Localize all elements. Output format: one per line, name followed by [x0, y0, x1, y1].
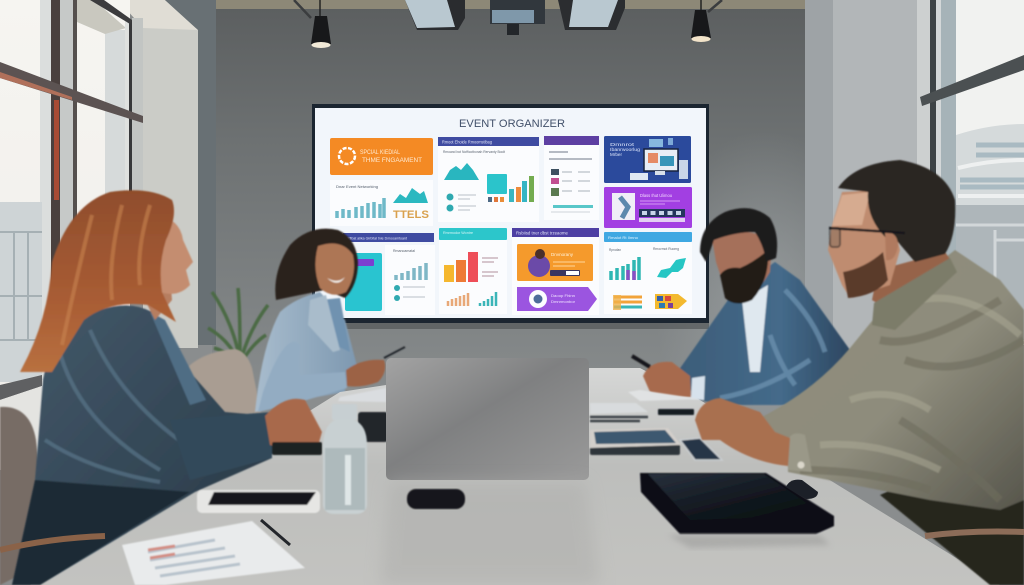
- paper right far: [628, 390, 700, 401]
- laptop lid: [386, 358, 589, 480]
- building windows: [960, 145, 1024, 187]
- back wall: [212, 8, 808, 388]
- lower terrace: [956, 205, 1024, 340]
- panel: lower orange and arrow: Rsbiisd tner dbst trzeaome: [516, 230, 568, 236]
- right man jacket highlights: [820, 298, 1020, 470]
- panel: networking card: Dnar Event Networking: [336, 184, 378, 189]
- panel: networking card: TTELS: [393, 209, 429, 221]
- panel: networking card: [330, 180, 433, 226]
- plant: [208, 288, 268, 365]
- center woman face: [315, 243, 354, 295]
- left woman hair highlights: [62, 205, 150, 345]
- right man collar: [872, 258, 957, 330]
- projector: [490, 0, 545, 35]
- panel: blue monitor card: Mrber: [610, 152, 622, 157]
- left window panes: [0, 0, 130, 400]
- right man hair: [838, 160, 955, 262]
- pane two tile column: [105, 30, 126, 200]
- panel: lower right charts: Rmalot Rt Ilmno: [608, 235, 639, 240]
- middle man cuff: [691, 376, 705, 400]
- building detail: [0, 232, 42, 340]
- left woman jacket: [12, 305, 272, 585]
- panel: top middle charts: [438, 137, 539, 222]
- left woman sleeve highlight: [45, 330, 190, 482]
- center woman lapel: [308, 295, 340, 352]
- tablet under hand: [680, 438, 722, 460]
- panel: lower orange and arrow: Dmnrmonbor: [551, 299, 576, 304]
- panel: lower middle charts: [439, 228, 507, 314]
- panel: top middle charts: Rmoot Ehoide Rmoomstibag: [442, 140, 492, 144]
- pendant lamp right: [691, 0, 711, 42]
- notebook stack: [590, 403, 648, 421]
- small mouse right: [786, 480, 818, 499]
- water bottle: [323, 404, 367, 514]
- left wall: [143, 28, 198, 348]
- center woman sleeve: [258, 342, 347, 412]
- table items near: [122, 404, 834, 585]
- right outside building: [956, 124, 1024, 340]
- right man glasses: [829, 228, 905, 247]
- panel: social media: THME FNGAAMENT: [362, 158, 422, 164]
- center woman shirt: [320, 298, 350, 352]
- middle man hair: [700, 208, 777, 262]
- middle man jacket: [676, 262, 850, 405]
- center woman pen: [384, 347, 405, 358]
- left woman device: [272, 442, 322, 455]
- left woman lapel: [150, 312, 206, 405]
- chair: center back: [183, 349, 261, 416]
- panel: lower left teal: Rtlbat alika Girbital tnie Dmooamtoant: [347, 236, 408, 240]
- panel: lower left teal: Rmanoamatal: [393, 249, 415, 253]
- middle man phone: [632, 356, 650, 367]
- left window: [0, 0, 143, 470]
- table items far: [338, 388, 722, 460]
- chair arm left: [0, 536, 105, 550]
- panel: blue monitor card: Dmnrot: [610, 142, 635, 147]
- right wall: [805, 0, 917, 360]
- wall light glow: [655, 130, 875, 470]
- paper front: [122, 521, 305, 585]
- panel: social media: SPCIAL KIEDIAL: [360, 150, 401, 156]
- chair arm right: [925, 532, 1024, 536]
- center woman hair: [275, 229, 358, 300]
- person: left woman: [12, 190, 322, 585]
- chair: left front: [0, 407, 44, 585]
- middle man face: [712, 231, 772, 300]
- right man ear: [885, 232, 898, 260]
- panel: lower right charts: Rmovmot Ruomg: [653, 247, 679, 251]
- panel: lower orange and arrow: [512, 228, 599, 315]
- building bands: [958, 160, 1024, 196]
- pane two top reveal: [77, 0, 126, 34]
- panel: top list: [544, 136, 599, 220]
- lower window sill light: [0, 386, 42, 470]
- terrace rail: [956, 225, 1024, 320]
- ceiling fixtures: [294, 0, 722, 48]
- middle man hand: [643, 362, 691, 397]
- right window panes: [956, 0, 1024, 345]
- right man cuff: [788, 433, 812, 472]
- panel: blue monitor card: Ibanrwoorlug: [610, 147, 641, 152]
- left woman lower jacket dark: [12, 480, 190, 585]
- light panel right: [558, 0, 625, 30]
- left woman sleeve: [170, 412, 272, 480]
- center woman smile: [327, 277, 345, 283]
- right man hand: [695, 398, 790, 466]
- panel: lower orange and arrow: Daoop Fhinn: [551, 293, 575, 298]
- center woman blazer: [255, 292, 358, 412]
- panel: purple card: [604, 187, 692, 228]
- dark lower body: [880, 430, 1024, 585]
- panel: lower left teal: [343, 233, 435, 315]
- screen title: EVENT ORGANIZER: [459, 118, 565, 130]
- right man forehead light: [832, 192, 870, 226]
- right man cuff button: [798, 462, 804, 468]
- right man jacket: [760, 250, 1024, 510]
- laptop reflection on table: [380, 482, 600, 585]
- screen surface: [315, 108, 706, 318]
- screen bezel: [312, 104, 709, 323]
- tablet stack: [590, 428, 681, 455]
- person: middle right man: [632, 208, 850, 405]
- light panel left: [405, 0, 465, 30]
- person: right man: [695, 160, 1024, 585]
- pen: [261, 520, 290, 545]
- panel: purple card: Dlass Ihut Ulimou: [640, 193, 672, 198]
- panel: social media: [330, 138, 433, 175]
- panel: lower right charts: Rpnofan: [609, 248, 621, 252]
- mouse black: [407, 489, 465, 509]
- left outside building: [0, 202, 42, 382]
- tablet black: [640, 473, 834, 534]
- conference table: [30, 368, 1000, 585]
- pendant lamp left: [311, 0, 331, 48]
- left wall column: [165, 0, 216, 345]
- right man face: [828, 190, 900, 298]
- track lights: [294, 0, 722, 18]
- panel: lower middle charts: Rmrmodor Wontre: [443, 231, 473, 235]
- right window: [917, 0, 1024, 360]
- right man jacket shadows: [800, 300, 1024, 500]
- tablet shadow: [668, 535, 830, 548]
- left window frame: [51, 0, 60, 380]
- right man beard: [843, 252, 888, 298]
- left woman hair: [20, 190, 176, 372]
- panel: blue monitor card: [604, 136, 691, 183]
- left soffit: [118, 0, 198, 30]
- left woman hand: [265, 399, 322, 449]
- dark bag: [358, 412, 388, 442]
- middle man highlight: [720, 290, 825, 398]
- pane one tile column: [40, 0, 51, 380]
- right wall shade: [805, 0, 833, 360]
- phone white: [197, 490, 320, 513]
- small phone far: [658, 409, 694, 415]
- right man neck: [872, 252, 952, 308]
- ceiling strip: [200, 0, 930, 9]
- left woman face: [140, 215, 193, 294]
- center woman hand: [346, 360, 385, 386]
- left woman neck: [135, 275, 172, 320]
- panel: lower right charts: [604, 232, 692, 314]
- screen stand shadow: [312, 323, 709, 329]
- panel: lower orange and arrow: Dnvnorany: [551, 252, 574, 257]
- middle man shirt: [742, 285, 768, 372]
- wall screen: [312, 104, 709, 329]
- laptop: [380, 358, 600, 585]
- right window frame: [917, 0, 930, 360]
- middle man beard: [720, 250, 768, 304]
- paper left far: [338, 388, 386, 402]
- person: center woman: [255, 229, 405, 412]
- panel: top middle charts: Rmoand bot Nofficotbonah Rervanty Boolt: [443, 150, 505, 154]
